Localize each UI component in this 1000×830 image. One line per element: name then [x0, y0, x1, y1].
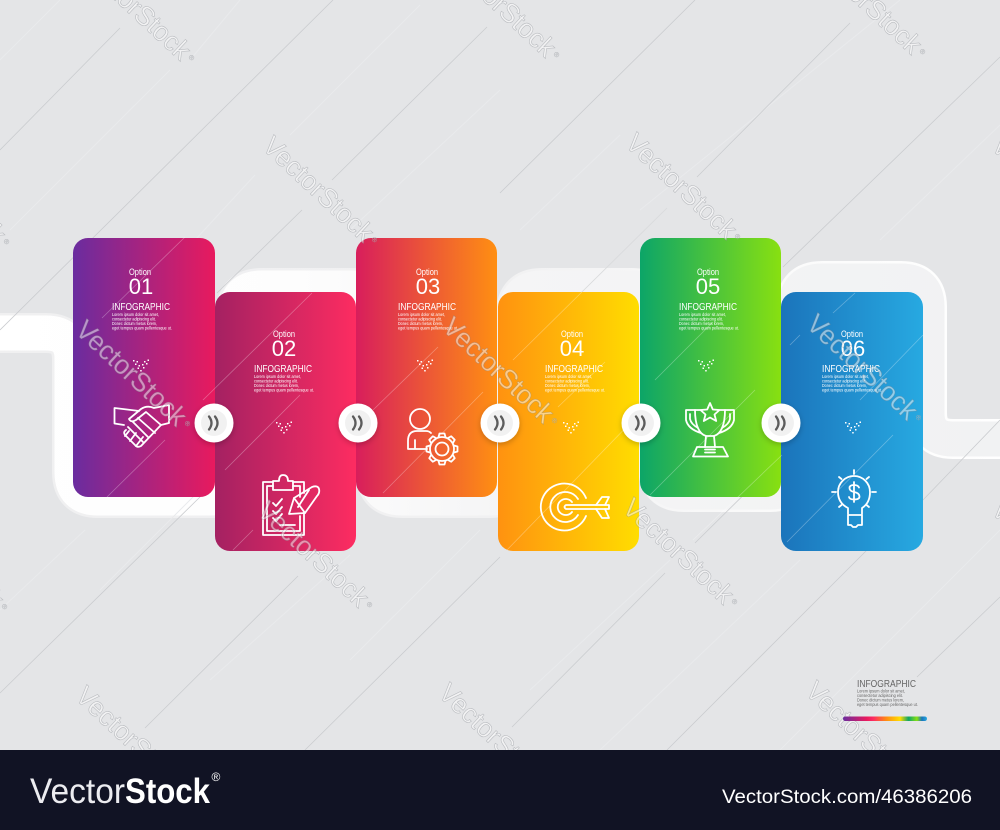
VectorStock watermarks: ® — [733, 232, 743, 242]
card 1: INFOGRAPHIC — [112, 302, 170, 313]
VectorStock watermarks: ® — [370, 235, 380, 245]
VectorStock watermarks: ® — [914, 413, 924, 423]
card 1: eget tempus quam pellentesque ut. — [112, 326, 172, 330]
card 5: Donec dictum metus lorem, — [679, 321, 724, 326]
card 4: 04 — [560, 336, 584, 361]
card 4: consectetur adipiscing elit. — [545, 378, 589, 384]
card 4: Lorem ipsum dolor sit amet, — [545, 374, 592, 379]
legend: consectetur adipiscing elit. — [857, 693, 903, 698]
card 1: 01 — [129, 274, 153, 299]
card 1 — [73, 238, 215, 497]
VectorStock watermarks: ® — [552, 50, 562, 60]
card 5: 05 — [696, 274, 720, 299]
arrow button 2 — [338, 404, 378, 442]
VectorStock watermarks: VectorStock — [801, 308, 924, 426]
card 3: Option — [416, 267, 438, 278]
arrow button 3 — [480, 404, 520, 442]
card 3: Lorem ipsum dolor sit amet, — [398, 312, 445, 317]
white winding track — [0, 281, 1000, 498]
footer bar — [0, 750, 1000, 830]
VectorStock watermarks: ® — [365, 600, 375, 610]
card 3 — [356, 238, 497, 497]
VectorStock watermarks: VectorStock — [437, 311, 560, 429]
legend: Donec dictum metus lorem, — [857, 698, 904, 702]
card 5: eget tempus quam pellentesque ut. — [679, 326, 739, 330]
icon: light bulb with dollar — [832, 470, 876, 527]
footer bar: Stock — [125, 772, 210, 811]
card 1: Lorem ipsum dolor sit amet, — [112, 312, 159, 317]
card 4: Donec dictum metus lorem, — [545, 383, 590, 388]
VectorStock watermarks: VectorStock — [800, 675, 923, 793]
card 5: Option — [697, 267, 719, 278]
icon: trophy — [686, 403, 734, 456]
card 6: 06 — [841, 336, 865, 361]
VectorStock watermarks: ® — [730, 597, 740, 607]
card 4: eget tempus quam pellentesque ut. — [545, 388, 605, 392]
VectorStock watermarks: VectorStock — [617, 492, 740, 610]
legend: Lorem ipsum dolor sit amet, — [857, 688, 905, 694]
card 5 — [640, 238, 781, 497]
card 3: consectetur adipiscing elit. — [398, 316, 442, 322]
card 4: INFOGRAPHIC — [545, 364, 603, 375]
card 1: Option — [129, 267, 151, 278]
footer bar: ® — [212, 770, 220, 784]
footer logo: Vector — [30, 772, 125, 811]
icon: target with arrow — [541, 483, 609, 530]
card 1: Donec dictum metus lorem, — [112, 321, 157, 326]
card 2: INFOGRAPHIC — [254, 364, 312, 375]
card 6: consectetur adipiscing elit. — [822, 378, 866, 384]
card 5: consectetur adipiscing elit. — [679, 316, 723, 322]
VectorStock watermarks: VectorStock — [70, 314, 193, 432]
rainbow bar — [843, 716, 927, 721]
light diagonal lines across cards — [102, 208, 923, 550]
card 4 — [498, 292, 639, 551]
card 6: eget tempus quam pellentesque ut. — [822, 388, 882, 392]
legend: eget tempus quam pellentesque ut. — [857, 702, 918, 707]
VectorStock watermarks: VectorStock — [257, 130, 380, 248]
footer url: VectorStock.com/46386206 — [722, 786, 972, 808]
card 2: eget tempus quam pellentesque ut. — [254, 388, 314, 392]
card 3: INFOGRAPHIC — [398, 302, 456, 313]
arrow button 4 — [622, 404, 660, 442]
card 6: Option — [841, 329, 863, 340]
card 3: eget tempus quam pellentesque ut. — [398, 326, 458, 330]
card 6: INFOGRAPHIC — [822, 364, 880, 375]
VectorStock watermarks: VectorStock — [252, 495, 375, 613]
card 2: 02 — [272, 336, 296, 361]
card 6 — [781, 292, 923, 551]
icon: clipboard and pencil — [263, 475, 319, 535]
card 2: Option — [273, 329, 295, 340]
arrow button 5 — [762, 404, 800, 442]
VectorStock watermarks: VectorStock — [433, 677, 556, 795]
card 6: Lorem ipsum dolor sit amet, — [822, 374, 869, 379]
card 6: Donec dictum metus lorem, — [822, 383, 867, 388]
arrow button 1 — [194, 404, 234, 442]
icon: handshake — [114, 405, 169, 447]
VectorStock watermarks: VectorStock — [620, 127, 743, 245]
icon: person with gear — [408, 409, 458, 464]
VectorStock watermarks: ® — [918, 47, 928, 57]
VectorStock watermarks: ® — [187, 53, 197, 63]
card 2 — [215, 292, 356, 551]
card 2: Donec dictum metus lorem, — [254, 383, 299, 388]
VectorStock watermarks: ® — [2, 237, 12, 247]
VectorStock watermarks: VectorStock — [70, 680, 193, 798]
legend: INFOGRAPHIC — [857, 679, 916, 690]
card 2: consectetur adipiscing elit. — [254, 378, 298, 384]
VectorStock watermarks: ® — [183, 419, 193, 429]
card 4: Option — [561, 329, 583, 340]
card 2: Lorem ipsum dolor sit amet, — [254, 374, 301, 379]
card 3: 03 — [416, 274, 440, 299]
card 5: Lorem ipsum dolor sit amet, — [679, 312, 726, 317]
card 5: INFOGRAPHIC — [679, 302, 737, 313]
card 1: consectetur adipiscing elit. — [112, 316, 156, 322]
card 3: Donec dictum metus lorem, — [398, 321, 443, 326]
legend — [843, 679, 927, 721]
VectorStock watermarks: ® — [550, 416, 560, 426]
